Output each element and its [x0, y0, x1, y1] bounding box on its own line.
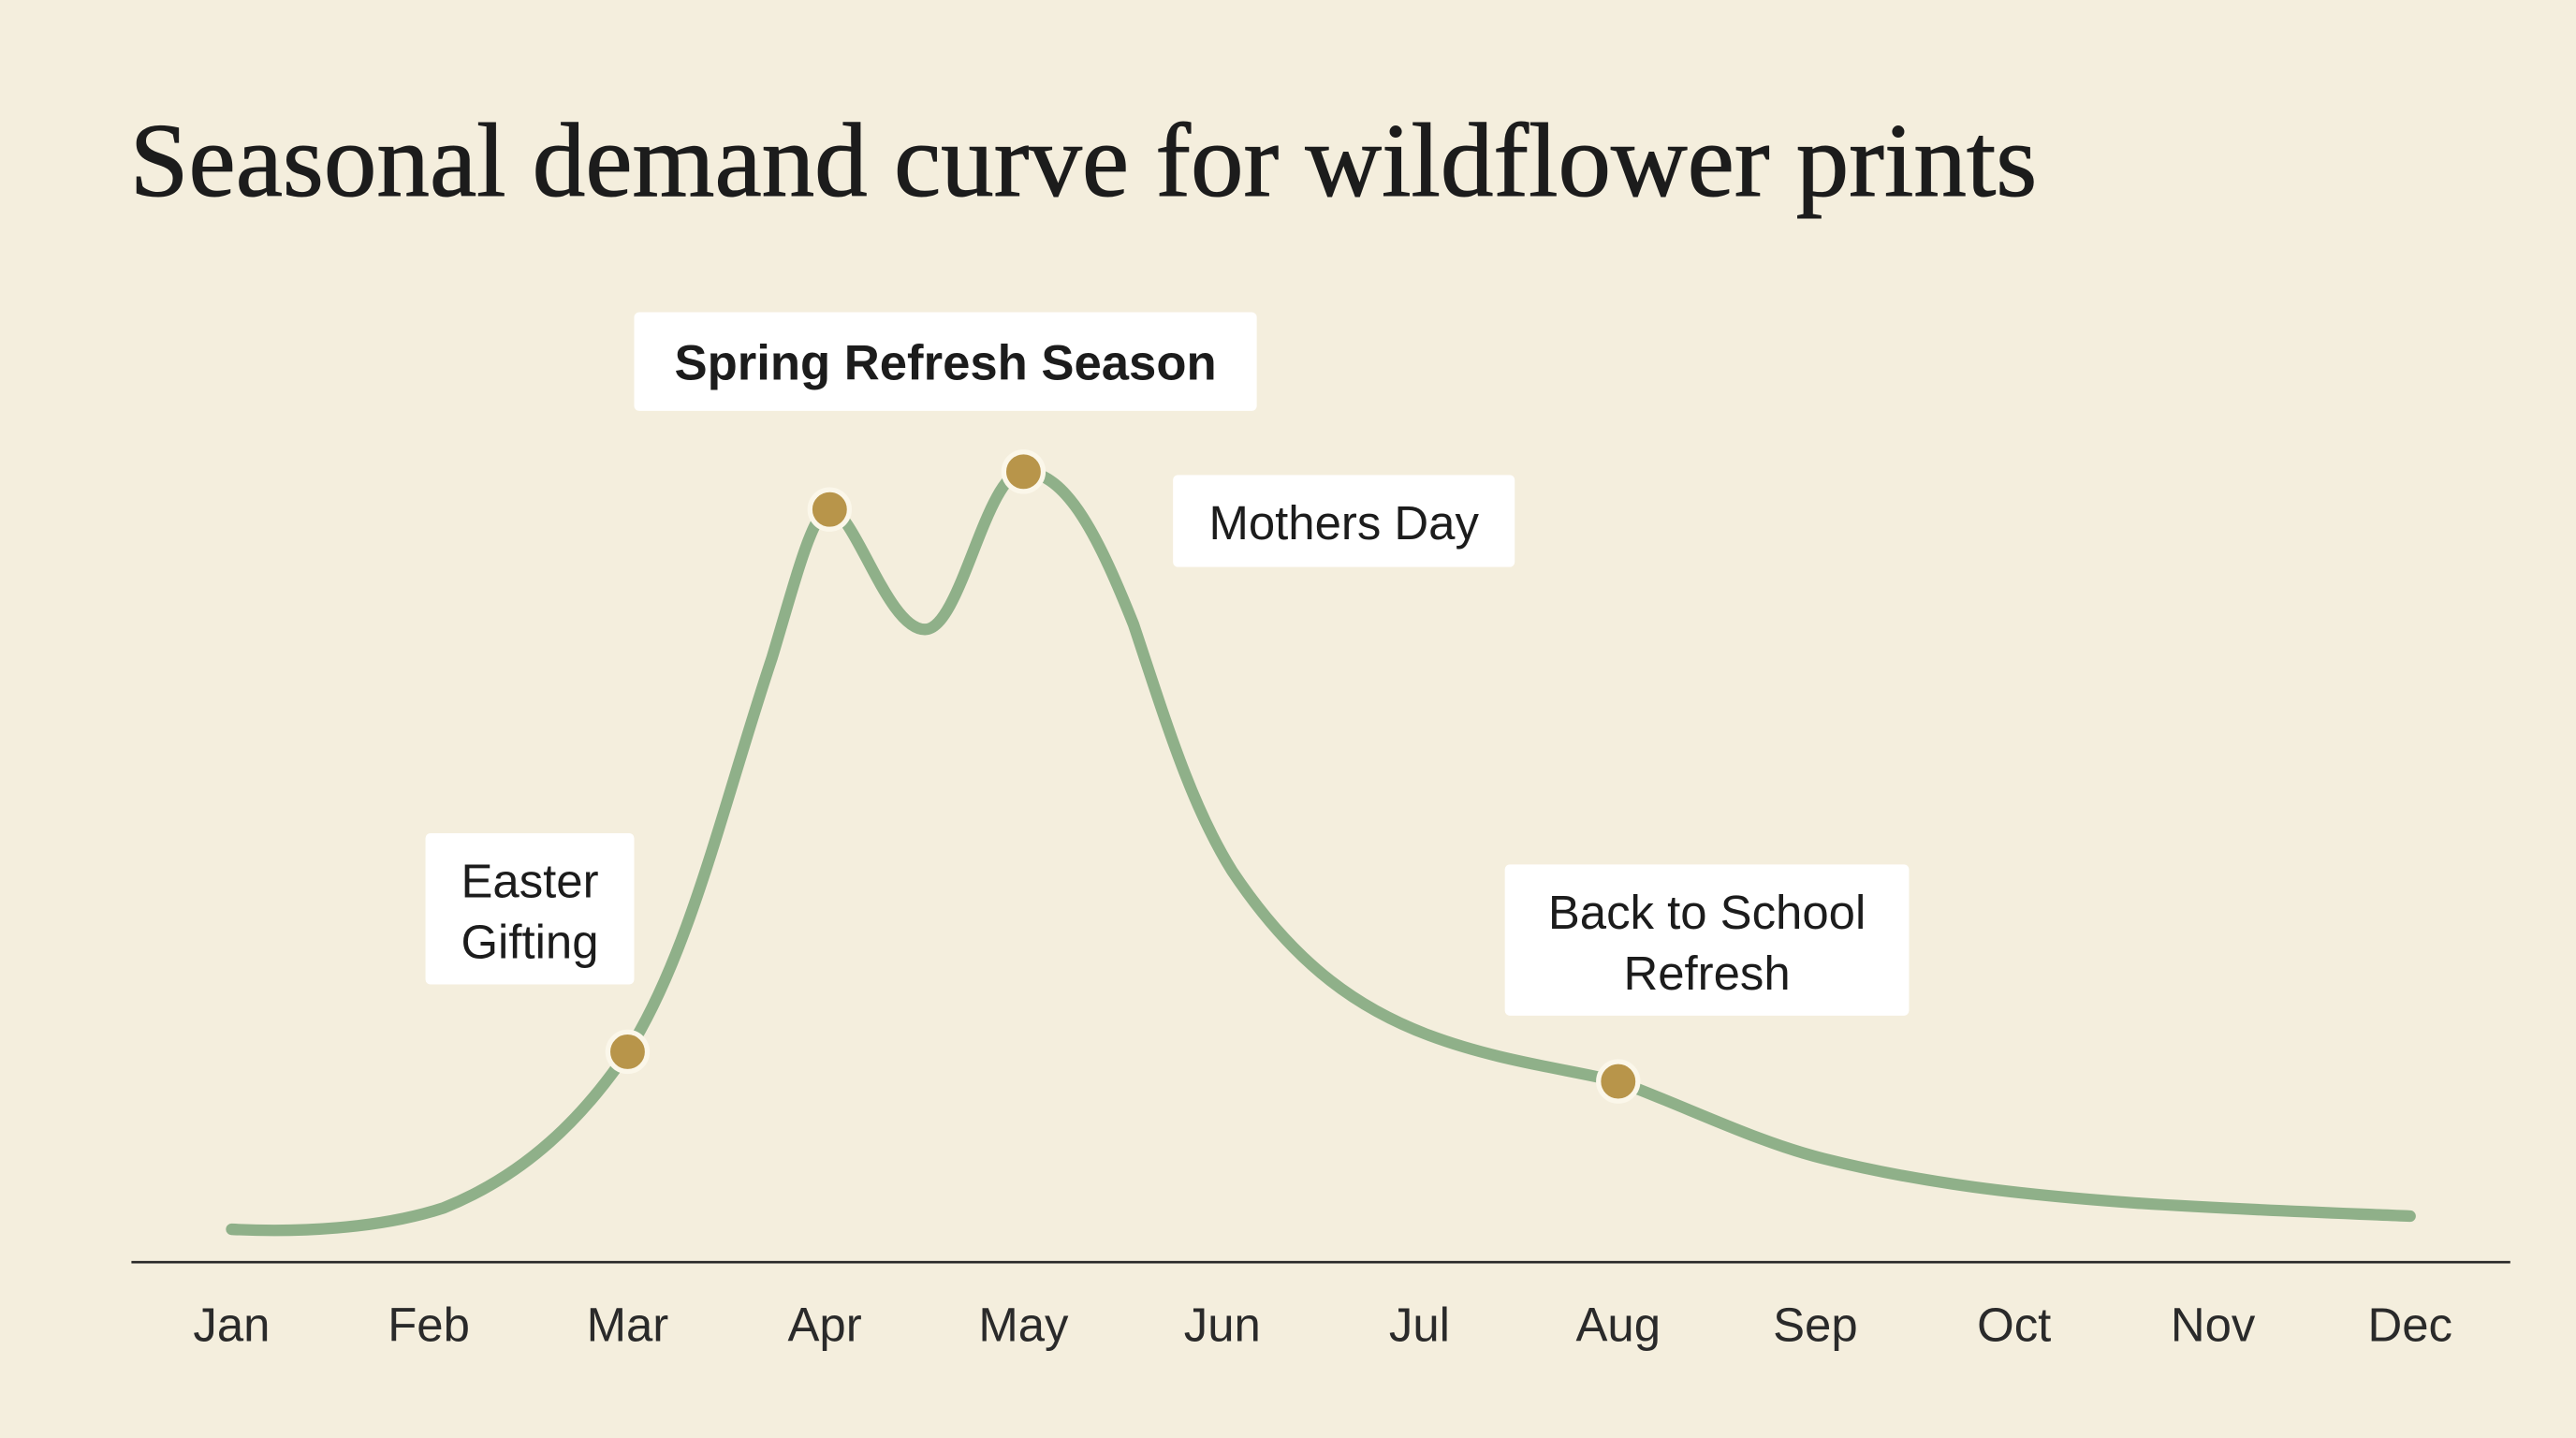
label: Mothers Day: Mothers Day: [1208, 496, 1479, 550]
label: Back to School Refresh: Back to School: [1548, 886, 1866, 939]
month labels: Feb: [388, 1298, 470, 1351]
month labels: Jul: [1389, 1298, 1450, 1351]
month labels: Mar: [587, 1298, 668, 1351]
x axis line: [131, 1261, 2510, 1263]
label: Easter Gifting: Easter: [461, 854, 599, 907]
month labels: Aug: [1575, 1298, 1661, 1351]
label: Spring Refresh Season: [634, 313, 1257, 411]
month labels: Oct: [1977, 1298, 2051, 1351]
month labels: Nov: [2171, 1298, 2256, 1351]
label: Easter Gifting: [426, 833, 634, 985]
month labels: May: [978, 1298, 1069, 1351]
month labels: Jun: [1184, 1298, 1261, 1351]
label: Mothers Day: [1173, 475, 1515, 567]
month labels: Dec: [2367, 1298, 2452, 1351]
month labels: [193, 1298, 2452, 1351]
demand curve: [231, 472, 2410, 1230]
label: Back to School Refresh: [1505, 864, 1909, 1016]
title: Seasonal demand curve for wildflower prints: [130, 103, 2037, 219]
label: Easter Gifting: Gifting: [461, 915, 599, 968]
marker dots: [607, 452, 1638, 1101]
month labels: Jan: [193, 1298, 270, 1351]
month labels: Apr: [787, 1298, 862, 1351]
label: Back to School Refresh: Refresh: [1623, 946, 1791, 1000]
month labels: Sep: [1773, 1298, 1858, 1351]
label: Spring Refresh Season: Spring Refresh Season: [674, 335, 1217, 391]
